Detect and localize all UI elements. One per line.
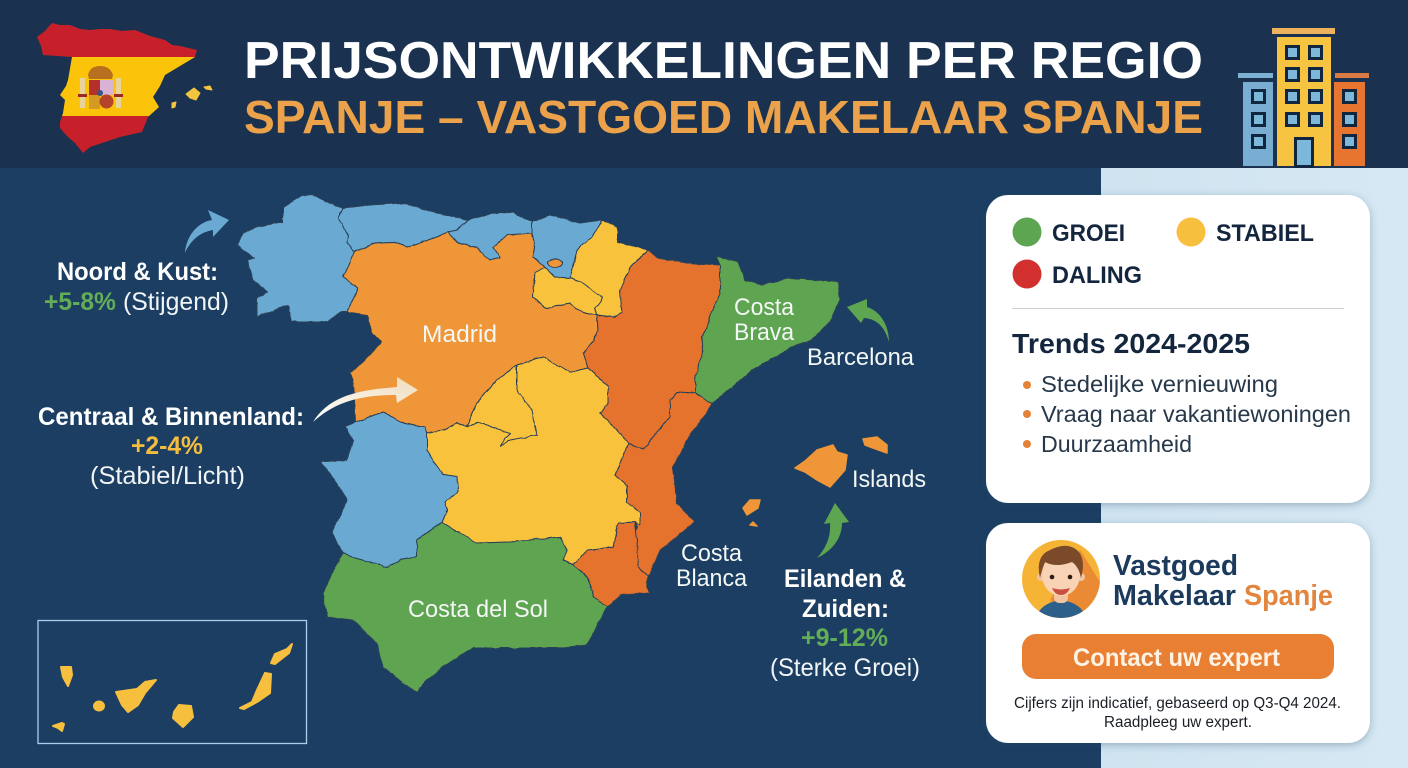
panel: contact bbox=[986, 523, 1370, 743]
legend: groei bbox=[1012, 218, 1125, 247]
callout: Eilanden en Zuiden: Zuiden: bbox=[802, 595, 889, 623]
map labels: Blanca bbox=[676, 565, 748, 592]
brand name: Makelaar bbox=[1113, 580, 1236, 612]
callout: Noord en Kust: Noord & Kust: bbox=[57, 258, 218, 286]
icon: buildings bbox=[1238, 28, 1369, 166]
region: Catalonia bbox=[695, 256, 840, 404]
map labels: Brava bbox=[734, 319, 795, 346]
icon: Spain flag map bbox=[37, 23, 212, 153]
region: Extremadura bbox=[320, 412, 458, 567]
region: Castilla La Mancha bbox=[427, 357, 640, 565]
brand name: Vastgoed bbox=[1113, 550, 1238, 582]
region: Valencia bbox=[615, 392, 712, 577]
arrow: north coast bbox=[185, 210, 229, 253]
footnote bbox=[1014, 695, 1341, 731]
icon: avatar bbox=[1022, 540, 1100, 618]
callout: Centraal en Binnenland: (Stabiel/Licht) bbox=[90, 462, 245, 490]
legend: daling: DALING bbox=[1052, 262, 1142, 289]
arrow: islands bbox=[817, 503, 849, 558]
trends list bbox=[1023, 371, 1351, 457]
map of Spain regions bbox=[237, 194, 840, 692]
legend: stabiel: STABIEL bbox=[1216, 220, 1314, 247]
footnote: Cijfers zijn indicatief, gebaseerd op Q3-Q4 2024. bbox=[1014, 695, 1341, 712]
trends heading: Trends 2024-2025 bbox=[1012, 328, 1250, 359]
region: Galicia bbox=[237, 194, 358, 322]
region: Trevino enclave bbox=[548, 259, 562, 267]
region: Cantabria bbox=[448, 212, 532, 260]
icon: Balearic islands small bbox=[172, 86, 212, 108]
legend: daling bbox=[1012, 260, 1142, 289]
callout: Eilanden en Zuiden: +9-12% bbox=[801, 624, 888, 652]
subtitle: SPANJE – VASTGOED MAKELAAR SPANJE bbox=[244, 91, 1203, 143]
footnote: Raadpleeg uw expert. bbox=[1104, 714, 1252, 731]
region: Andalucia bbox=[323, 522, 607, 692]
title bbox=[244, 32, 1203, 143]
map labels: Barcelona bbox=[807, 344, 915, 371]
callout: Centraal en Binnenland: +2-4% bbox=[131, 432, 203, 460]
panel: legend and trends bbox=[986, 195, 1370, 503]
region: La Rioja and Navarra bbox=[533, 220, 648, 317]
button: contact: Contact uw expert bbox=[1073, 644, 1281, 672]
legend: stabiel bbox=[1176, 218, 1314, 247]
callout: Eilanden en Zuiden: Eilanden & bbox=[784, 565, 906, 593]
callout: Noord en Kust bbox=[44, 258, 229, 316]
Balearic islands bbox=[743, 437, 887, 526]
arrow: Barcelona bbox=[847, 299, 889, 342]
map labels: Costa bbox=[734, 294, 795, 321]
trends list: Duurzaamheid bbox=[1041, 431, 1192, 457]
map labels: Madrid bbox=[422, 321, 497, 348]
region: Murcia bbox=[573, 522, 650, 607]
map labels bbox=[408, 294, 926, 623]
legend: groei: GROEI bbox=[1052, 220, 1125, 247]
region: Castilla y Leon bbox=[343, 232, 598, 433]
title: PRIJSONTWIKKELINGEN PER REGIO bbox=[244, 32, 1203, 90]
map labels: Islands bbox=[852, 466, 926, 493]
brand name: Spanje bbox=[1244, 580, 1333, 612]
Canary islands shapes bbox=[53, 644, 292, 731]
header band bbox=[0, 0, 1408, 168]
map labels: Costa bbox=[681, 540, 743, 567]
map labels: Costa del Sol bbox=[408, 596, 548, 623]
region: Asturias bbox=[338, 203, 468, 252]
callout: Noord en Kust: (Stijgend) bbox=[123, 288, 229, 316]
trends list: Stedelijke vernieuwing bbox=[1041, 371, 1278, 397]
callout: Eilanden en Zuiden: (Sterke Groei) bbox=[770, 654, 920, 682]
callout: Noord en Kust: +5-8% bbox=[44, 288, 116, 316]
region: Aragon bbox=[583, 250, 720, 449]
callout: Centraal en Binnenland bbox=[38, 403, 304, 490]
trends list: Vraag naar vakantiewoningen bbox=[1041, 401, 1351, 427]
brand name bbox=[1113, 550, 1333, 612]
callout: Centraal en Binnenland: Centraal & Binnenland: bbox=[38, 403, 304, 431]
arrow: central bbox=[313, 377, 418, 422]
button: contact bbox=[1022, 634, 1334, 679]
icon: coat of arms bbox=[78, 66, 123, 109]
callout: Eilanden en Zuiden bbox=[770, 565, 920, 682]
region: Madrid bbox=[467, 365, 537, 447]
region: Basque Country bbox=[532, 215, 602, 278]
Canary Islands inset bbox=[38, 620, 306, 744]
